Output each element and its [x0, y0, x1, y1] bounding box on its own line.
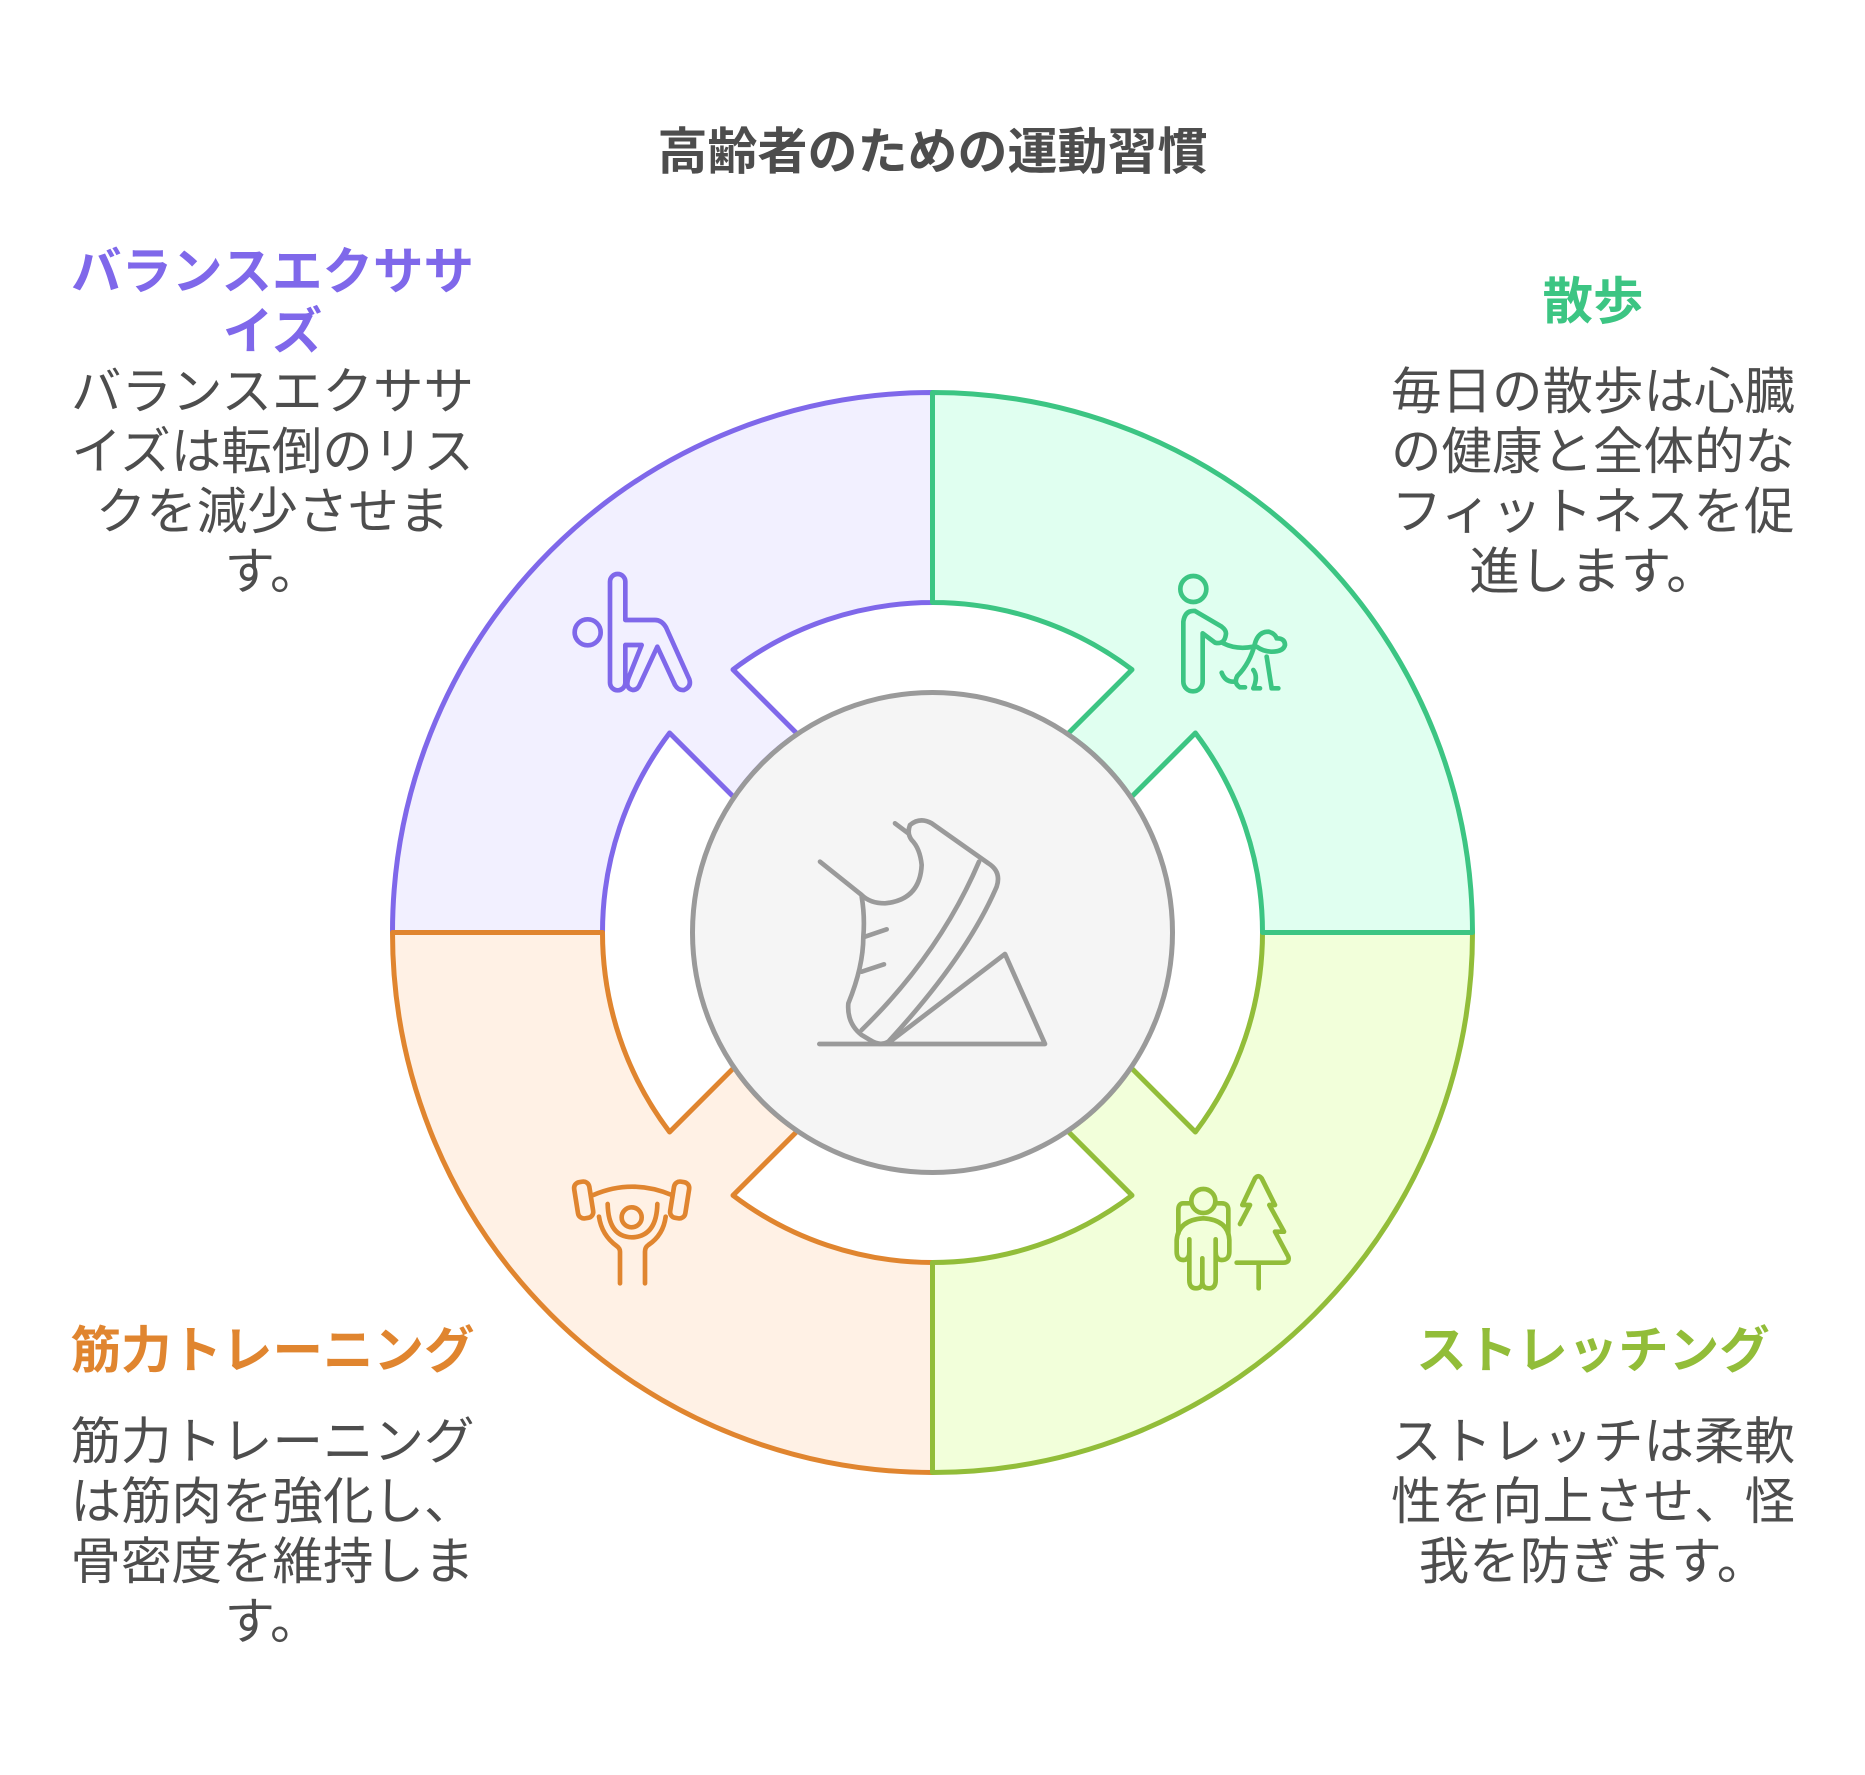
text: walking: 毎日の散歩は心臓 — [1391, 363, 1795, 420]
text: balance exercise — [71, 363, 474, 600]
text: walking: フィットネスを促 — [1392, 483, 1794, 540]
panel: balance exercise segment — [392, 392, 932, 932]
text: strength training: す。 — [225, 1593, 320, 1650]
text: strength training: 骨密度を維持しま — [70, 1533, 474, 1590]
heading: balance exercise — [71, 243, 474, 360]
title: 高齢者のための運動習慣 — [658, 124, 1208, 180]
text: balance exercise: クを減少させま — [96, 483, 449, 540]
text: strength training: は筋肉を強化し、 — [70, 1473, 474, 1530]
text: walking: 進します。 — [1469, 543, 1717, 600]
icon: person walking dog — [1180, 576, 1285, 691]
text: stretching: 我を防ぎます。 — [1419, 1533, 1767, 1590]
text: balance exercise: す。 — [225, 543, 320, 600]
text: walking: の健康と全体的な — [1391, 423, 1795, 480]
text: stretching — [1391, 1413, 1795, 1590]
heading: stretching: ストレッチング — [1416, 1322, 1770, 1379]
text: strength training: 筋力トレーニング — [70, 1413, 474, 1470]
text: strength training — [70, 1413, 474, 1650]
icon: hiker and tree — [1177, 1176, 1289, 1288]
text: stretching: ストレッチは柔軟 — [1391, 1413, 1795, 1470]
panel: walking segment — [932, 392, 1472, 932]
heading: balance exercise: バランスエクササ — [71, 243, 474, 300]
text: stretching: 性を向上させ、怪 — [1391, 1473, 1795, 1530]
icon: person lifting barbell — [573, 1181, 690, 1283]
heading: walking: 散歩 — [1542, 273, 1644, 330]
text: balance exercise: バランスエクササ — [71, 363, 474, 420]
text: balance exercise: イズは転倒のリス — [71, 423, 474, 480]
panel: stretching segment — [932, 932, 1472, 1472]
panel: strength training segment — [392, 932, 932, 1472]
icon: running shoe on incline — [819, 820, 1045, 1044]
heading: strength training: 筋力トレーニング — [70, 1322, 474, 1379]
heading: balance exercise: イズ — [223, 303, 322, 360]
text: walking — [1391, 363, 1795, 600]
central circle — [692, 692, 1172, 1172]
icon: person stretching — [575, 574, 690, 690]
